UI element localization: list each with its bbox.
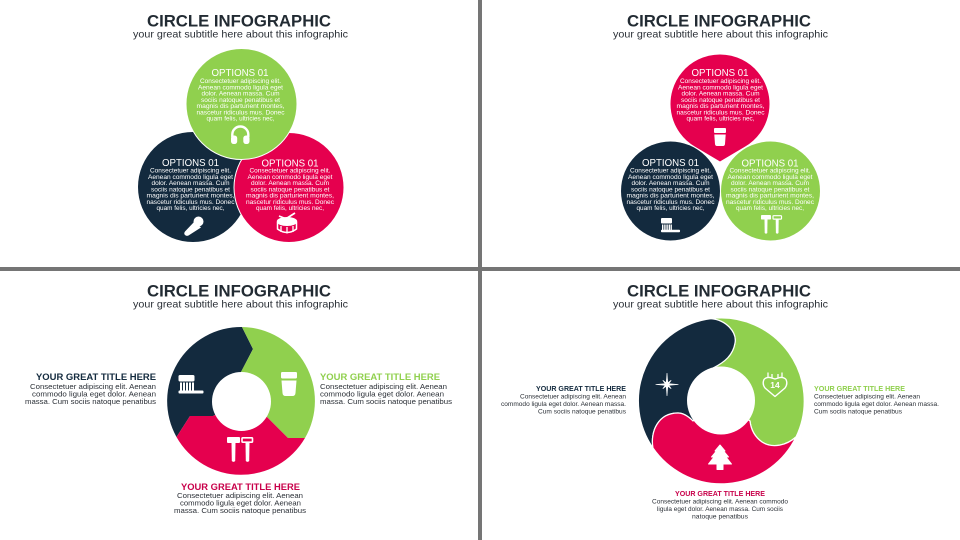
text: green option: sociis natoque penatibus et	[201, 97, 280, 104]
text: navy option: magnis dis parturient montes,	[146, 193, 235, 200]
icon: calendar heart: 14	[770, 380, 780, 390]
heading: CIRCLE INFOGRAPHIC	[147, 12, 331, 30]
text: navy option: magnis dis parturient montes,	[626, 193, 715, 200]
circle: navy	[621, 142, 720, 240]
text: green option: nascetur ridiculus mus. Donec	[196, 109, 285, 116]
circle: green	[721, 142, 820, 240]
text: navy option: Consectetuer adipiscing elit.	[150, 168, 231, 175]
text block: right green: YOUR GREAT TITLE HERE	[814, 385, 905, 393]
icon: headphones	[231, 126, 250, 144]
segment: navy	[167, 327, 253, 437]
segment: red	[652, 401, 796, 484]
text block: right green	[320, 371, 452, 406]
text block: bottom red: YOUR GREAT TITLE HERE	[675, 490, 765, 498]
circle: navy	[138, 132, 248, 242]
text block: left navy	[25, 371, 156, 406]
text: red option: OPTIONS 01	[692, 68, 749, 79]
text: navy option: quam felis, ultricies nec,	[156, 205, 225, 212]
text: red option: sociis natoque penatibus et	[681, 97, 760, 104]
text: green option: quam felis, ultricies nec,	[206, 116, 275, 123]
text: red option: dolor. Aenean massa. Cum	[682, 91, 760, 98]
text: green option: dolor. Aenean massa. Cum	[731, 180, 809, 187]
segment: navy	[638, 319, 735, 448]
text: navy option: Aenean commodo ligula eget	[148, 174, 233, 181]
heading: your great subtitle here about this infographic	[613, 300, 828, 310]
text block: right green: Cum sociis natoque penatibus	[814, 408, 902, 416]
heading	[133, 282, 348, 310]
panel: swirl donut	[501, 282, 939, 520]
text block: bottom red: natoque penatibus	[692, 514, 748, 520]
text block: bottom red: Consectetuer adipiscing elit. Aenean commodo	[652, 498, 789, 506]
text: green option: OPTIONS 01	[212, 68, 269, 79]
circle: red	[234, 132, 344, 242]
text block: left navy: commodo ligula eget dolor. Aenean massa.	[501, 401, 626, 408]
heading: CIRCLE INFOGRAPHIC	[627, 12, 811, 30]
text: red option: Aenean commodo ligula eget	[678, 84, 763, 91]
icon: toothbrush	[661, 218, 680, 232]
text: red option: magnis dis parturient montes,	[246, 193, 334, 200]
text block: right green: Consectetuer adipiscing elit. Aenean	[814, 394, 921, 400]
text: navy option	[626, 158, 715, 212]
text: green option: Consectetuer adipiscing elit.	[200, 78, 281, 85]
icon: cup	[714, 128, 726, 146]
text: navy option: nascetur ridiculus mus. Donec	[146, 199, 235, 206]
heading	[133, 12, 348, 40]
icon: razors	[227, 437, 252, 462]
text: green option	[196, 68, 285, 123]
text block: bottom red: YOUR GREAT TITLE HERE	[181, 481, 300, 492]
icon: razors	[761, 215, 782, 234]
text: green option: Aenean commodo ligula eget	[198, 84, 283, 91]
text block: left navy: massa. Cum sociis natoque penatibus	[25, 397, 156, 406]
panel: teardrop and circles	[613, 12, 828, 240]
text: red option: nascetur ridiculus mus. Donec	[676, 109, 765, 116]
text: navy option: Aenean commodo ligula eget	[628, 174, 713, 181]
text: red option: dolor. Aenean massa. Cum	[251, 180, 329, 187]
text block: left navy	[501, 385, 627, 416]
text: green option: quam felis, ultricies nec,	[736, 205, 804, 212]
panel: chevron donut	[25, 282, 452, 515]
text: navy option: sociis natoque penatibus et	[631, 186, 710, 193]
text block: right green	[814, 385, 939, 416]
icon: calendar heart	[763, 372, 787, 396]
icon: microphone	[184, 216, 204, 236]
text block: left navy: Consectetuer adipiscing elit. Aenean	[520, 394, 627, 400]
text: green option: magnis dis parturient montes,	[196, 103, 285, 110]
text: green option: Aenean commodo ligula eget	[728, 174, 813, 181]
text: navy option: dolor. Aenean massa. Cum	[632, 180, 710, 187]
icon: cup	[281, 372, 297, 396]
text: green option	[726, 158, 815, 212]
text: red option: Consectetuer adipiscing elit.	[250, 168, 331, 175]
text: green option: sociis natoque penatibus et	[730, 186, 810, 193]
text block: bottom red: ligula eget dolor. Aenean massa. Cum sociis	[657, 506, 783, 513]
donut hole	[687, 366, 755, 434]
text: green option: Consectetuer adipiscing elit.	[730, 168, 811, 175]
text block: left navy: YOUR GREAT TITLE HERE	[536, 385, 626, 393]
text: navy option: dolor. Aenean massa. Cum	[152, 180, 230, 187]
text block: left navy: Cum sociis natoque penatibus	[538, 408, 626, 416]
text: navy option: OPTIONS 01	[162, 158, 219, 169]
text block: right green: Consectetuer adipiscing elit. Aenean	[320, 382, 447, 391]
text: red option: nascetur ridiculus mus. Donec	[246, 199, 335, 206]
heading	[613, 282, 828, 310]
text block: left navy: YOUR GREAT TITLE HERE	[36, 371, 156, 382]
text: red option	[246, 158, 335, 212]
text block: left navy: commodo ligula eget dolor. Aenean	[32, 390, 156, 398]
text block: right green: commodo ligula eget dolor. Aenean	[320, 390, 444, 398]
heading: your great subtitle here about this infographic	[133, 30, 348, 40]
text: green option: nascetur ridiculus mus. Donec	[726, 199, 815, 206]
icon: toothbrush	[178, 375, 204, 394]
donut hole	[212, 372, 271, 431]
text block: right green: massa. Cum sociis natoque penatibus	[320, 397, 452, 406]
text: red option: sociis natoque penatibus et	[250, 186, 330, 193]
icon: star	[656, 373, 678, 396]
heading: your great subtitle here about this infographic	[613, 30, 828, 40]
icon: drum	[278, 213, 296, 234]
text: red option: OPTIONS 01	[262, 158, 319, 170]
teardrop: red	[670, 54, 770, 162]
text: red option: Aenean commodo ligula eget	[248, 174, 333, 181]
text: green option: magnis dis parturient montes,	[726, 193, 814, 200]
text: red option	[676, 68, 765, 123]
segment: green	[241, 327, 315, 438]
text: navy option: nascetur ridiculus mus. Donec	[626, 199, 715, 206]
text block: left navy: Consectetuer adipiscing elit. Aenean	[30, 382, 156, 391]
segment: green	[711, 318, 804, 446]
text: green option: dolor. Aenean massa. Cum	[202, 91, 280, 98]
text: red option: magnis dis parturient montes,	[676, 103, 765, 110]
heading: your great subtitle here about this infographic	[133, 300, 348, 310]
text block: bottom red: massa. Cum sociis natoque penatibus	[174, 506, 306, 515]
text block: bottom red: Consectetuer adipiscing elit. Aenean	[177, 491, 303, 500]
heading: CIRCLE INFOGRAPHIC	[627, 282, 811, 300]
segment: red	[176, 401, 305, 475]
icon: tree	[708, 445, 732, 470]
text: navy option: sociis natoque penatibus et	[151, 186, 230, 193]
text: navy option: Consectetuer adipiscing elit.	[630, 168, 711, 175]
text: green option: OPTIONS 01	[742, 158, 799, 170]
panel: three overlapping circles	[133, 12, 348, 242]
circle: green	[186, 48, 297, 160]
text: navy option	[146, 158, 235, 212]
text: red option: Consectetuer adipiscing elit.	[680, 78, 761, 85]
text block: bottom red: commodo ligula eget dolor. Aenean	[180, 498, 301, 508]
heading	[613, 12, 828, 40]
text block: bottom red	[652, 490, 789, 520]
text block: right green: YOUR GREAT TITLE HERE	[320, 371, 440, 382]
heading: CIRCLE INFOGRAPHIC	[147, 282, 331, 300]
text block: right green: commodo ligula eget dolor. Aenean massa.	[814, 401, 939, 408]
text: navy option: quam felis, ultricies nec,	[636, 205, 705, 212]
text: red option: quam felis, ultricies nec,	[256, 205, 324, 212]
text block: bottom red	[174, 481, 306, 515]
text: red option: quam felis, ultricies nec,	[686, 116, 755, 123]
text: navy option: OPTIONS 01	[642, 158, 699, 169]
